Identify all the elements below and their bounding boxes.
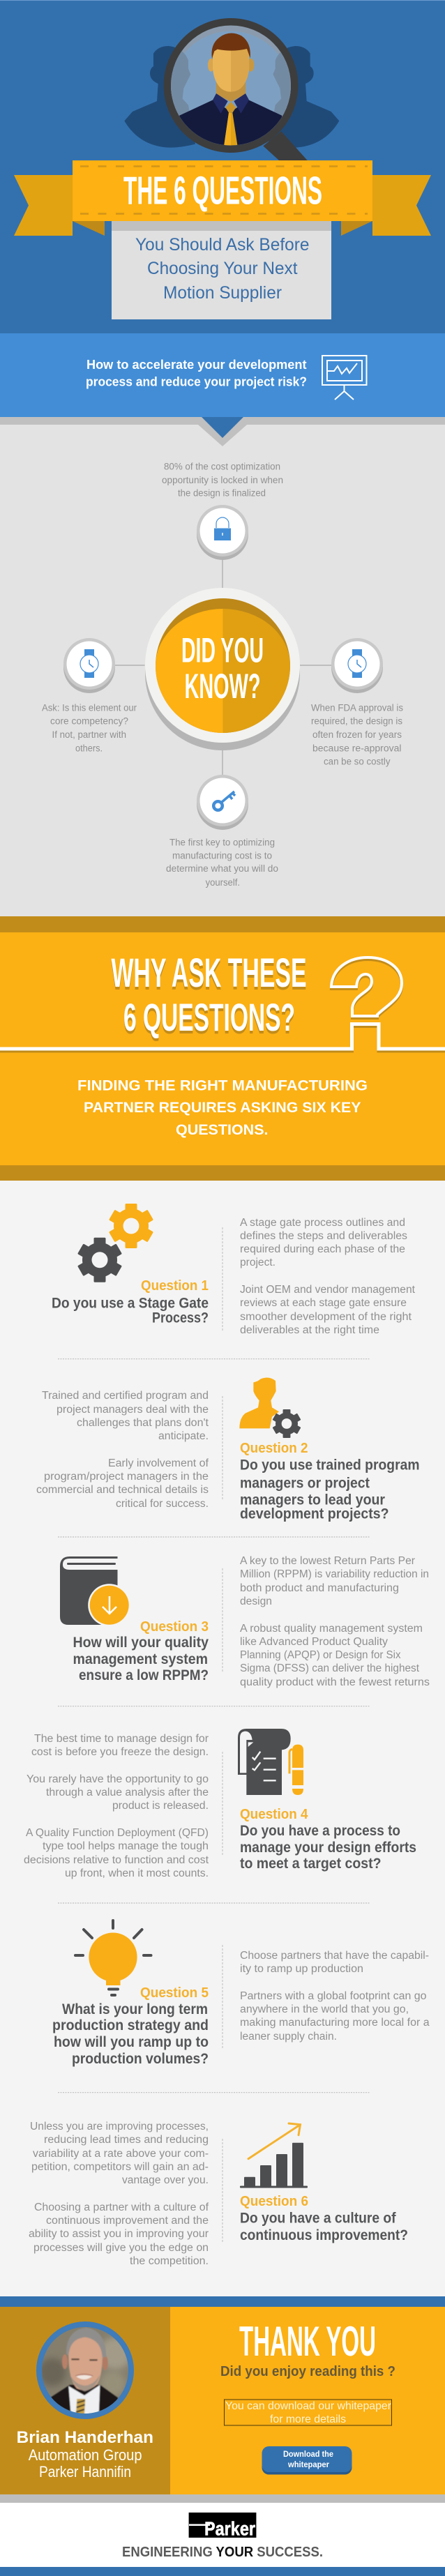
tagline: ENGINEERING YOUR SUCCESS.: [122, 2545, 323, 2560]
fact: cost optimization: [162, 462, 283, 498]
fact: cost optimization: 80% of the cost optimization: [164, 462, 280, 472]
author name: Brian Handerhan: [17, 2428, 153, 2447]
question 5 heading: production strategy and: [52, 2017, 209, 2033]
silhouette: left candidate: [124, 46, 195, 148]
question 2 heading: managers or project: [240, 1476, 370, 1492]
fact: core competency: [42, 703, 137, 754]
question 6 answer: Unless you are improving processes,: [30, 2121, 209, 2132]
question 4 answer: decisions relative to function and cost: [24, 1854, 209, 1866]
question 3 answer: design: [240, 1596, 272, 1607]
fact: first key: yourself.: [206, 877, 240, 888]
fact: FDA approval: can be so costly: [324, 757, 391, 767]
question 1 heading: [52, 1278, 209, 1326]
heading: why ask these: WHY ASK THESE: [112, 950, 307, 996]
connector lines: [115, 555, 331, 775]
question 6 answer: ability to assist you in improving your: [29, 2228, 209, 2240]
question 5 answer: making manufacturing more local for a: [240, 2017, 430, 2029]
question 6 answer: variability at a rate above your com-: [33, 2148, 209, 2160]
question 1 answer: smoother development of the right: [240, 1311, 412, 1323]
question 5 heading: how will you ramp up to: [54, 2034, 209, 2050]
heading: why ask these: [112, 950, 307, 1039]
question 6 answer: continuous improvement and the: [46, 2215, 209, 2227]
subtitle card: You Should Ask Before: [135, 235, 310, 255]
author portrait: [36, 2321, 134, 2419]
fact: core competency: others.: [75, 743, 103, 754]
icon: outlined question mark with line: [0, 957, 445, 1049]
fact: FDA approval: because re-approval: [312, 743, 402, 754]
icon: checklist and pen: [238, 1729, 303, 1795]
question 2 answer: Trained and certified program and: [42, 1390, 209, 1402]
question 5 heading: production volumes?: [72, 2051, 209, 2067]
question 2 answer: project managers deal with the: [56, 1404, 209, 1416]
question 1 answer: defines the steps and deliverables: [240, 1230, 407, 1242]
subtitle card: Motion Supplier: [163, 283, 282, 303]
question 4 heading: Do you have a process to: [240, 1823, 400, 1839]
question 2 heading: managers to lead your: [240, 1492, 385, 1508]
header background: [0, 0, 445, 333]
panel: question 3: [60, 1555, 430, 1688]
question 3 answer: [240, 1555, 430, 1688]
panel: question 1: [52, 1204, 416, 1336]
icon: person with gear: [239, 1377, 301, 1438]
Parker logo: Parker: [204, 2518, 255, 2540]
centre circle: KNOW?: [184, 667, 261, 706]
question 4 answer: up front, when it most counts.: [65, 1867, 209, 1879]
question 3 answer: quality product with the fewest returns: [240, 1676, 430, 1688]
panel: author: [0, 2296, 445, 2494]
icon: magnifying glass over candidate: [124, 18, 339, 160]
panel: acceleration question band: process and reduce your project risk?: [86, 375, 307, 389]
question 3 answer: Planning (APQP) or Design for Six: [240, 1649, 401, 1661]
fact: FDA approval: required, the design is: [311, 716, 402, 727]
subtitle card: [112, 221, 331, 319]
question 1 answer: project.: [240, 1257, 276, 1268]
whitepaper note box: You can download our whitepaper: [225, 2400, 392, 2412]
fact: FDA approval: often frozen for years: [312, 729, 402, 740]
question 3 heading: ensure a low RPPM?: [79, 1667, 209, 1683]
question 5 answer: [240, 1950, 430, 2043]
question 6 answer: reducing lead times and reducing: [44, 2134, 209, 2146]
question 1 heading: Do you use a Stage Gate: [52, 1296, 209, 1312]
question 5 answer: Choose partners that have the capabil-: [240, 1950, 429, 1962]
question 1 answer: required during each phase of the: [240, 1243, 405, 1255]
questions background: [0, 1181, 445, 2296]
icon: rising bar chart: [240, 2123, 308, 2188]
question 5 answer: leaner supply chain.: [240, 2031, 337, 2043]
question 2 answer: anticipate.: [158, 1430, 209, 1442]
panel: acceleration question band: [0, 333, 445, 916]
question 4 answer: cost is before you freeze the design.: [31, 1746, 209, 1758]
question 1 answer: [240, 1217, 416, 1336]
question 2 answer: challenges that plans don't: [77, 1417, 209, 1429]
question 4 heading: Question 4: [240, 1807, 308, 1822]
question 3 answer: like Advanced Product Quality: [240, 1636, 388, 1648]
panel: why ask these 6 questions: [0, 916, 445, 1181]
question 4 answer: [24, 1733, 209, 1879]
Parker logo: [189, 2513, 256, 2540]
question 1 heading: Process?: [152, 1310, 209, 1326]
question 3 heading: management system: [73, 1651, 208, 1667]
icon: presentation board: [322, 356, 367, 400]
lens contents: man in suit: [171, 25, 291, 145]
question 2 answer: critical for success.: [116, 1498, 209, 1510]
question 5 answer: ity to ramp up production: [240, 1963, 363, 1975]
icon: right watch: [331, 638, 383, 693]
fact: cost optimization: opportunity is locked in when: [162, 475, 283, 485]
fact: FDA approval: When FDA approval is: [311, 703, 403, 713]
question 5 answer: Partners with a global footprint can go: [240, 1990, 427, 2002]
icon: light bulb: [75, 1920, 151, 1995]
fact: core competency: If not, partner with: [52, 729, 126, 740]
question 2 heading: development projects?: [240, 1506, 389, 1522]
question 6 answer: Choosing a partner with a culture of: [34, 2202, 209, 2213]
text: finding the right partner: [77, 1078, 368, 1138]
magnifier ring: [163, 18, 298, 153]
fact: first key: The first key to optimizing: [169, 837, 275, 847]
question 6 answer: vantage over you.: [122, 2174, 209, 2186]
magnifier handle: [263, 131, 308, 160]
heading: why ask these: 6 QUESTIONS?: [123, 995, 295, 1039]
panel: question 2: [36, 1377, 420, 1522]
question 6 answer: processes will give you the edge on: [33, 2242, 209, 2254]
question 2 answer: commercial and technical details is: [36, 1484, 209, 1496]
question 6 heading: continuous improvement?: [240, 2227, 408, 2243]
author name: Automation Group: [29, 2446, 142, 2464]
question 4 heading: manage your design efforts: [240, 1840, 416, 1856]
question 3 answer: Sigma (DFSS) can deliver the highest: [240, 1662, 420, 1674]
question 5 heading: [52, 1985, 209, 2067]
text: finding the right partner: QUESTIONS.: [176, 1122, 268, 1138]
ribbon banner: [14, 160, 431, 236]
question 2 answer: [36, 1390, 209, 1510]
panel: question 6: [29, 2121, 408, 2267]
panel: thank you: [170, 2307, 445, 2494]
panel: question 4: [24, 1729, 416, 1879]
question 4 answer: type tool helps manage the tough: [43, 1840, 209, 1852]
question 2 answer: Early involvement of: [108, 1457, 209, 1469]
question 1 answer: Joint OEM and vendor management: [240, 1284, 416, 1296]
subtitle card: Choosing Your Next: [147, 259, 298, 278]
question 3 answer: A key to the lowest Return Parts Per: [240, 1555, 415, 1567]
icon: left watch: [63, 638, 115, 693]
panel: footer: [0, 2494, 445, 2576]
fact: core competency: core competency?: [50, 716, 128, 727]
silhouette: right candidate: [269, 46, 339, 148]
question 5 heading: What is your long term: [62, 2001, 208, 2017]
question 5 heading: Question 5: [140, 1985, 209, 2001]
icon: key: [197, 775, 248, 830]
question 3 answer: Million (RPPM) is variability reduction in: [240, 1568, 429, 1580]
ribbon right tail: [372, 175, 431, 236]
question 6 heading: Question 6: [240, 2194, 308, 2209]
text: finding the right partner: FINDING THE RIGHT MANUFACTURING: [77, 1078, 368, 1093]
ribbon left tail: [14, 175, 73, 236]
question 2 heading: Question 2: [240, 1441, 308, 1456]
question 6 answer: petition, competitors will gain an ad-: [31, 2161, 209, 2173]
centre circle: [145, 588, 300, 750]
panel: question 5: [52, 1920, 430, 2067]
download button: whitepaper: [287, 2460, 329, 2469]
fact: FDA approval: [311, 703, 403, 767]
download button: Download the: [283, 2449, 333, 2459]
author name: [17, 2428, 153, 2480]
question 3 answer: both product and manufacturing: [240, 1582, 399, 1594]
question 1 answer: A stage gate process outlines and: [240, 1217, 405, 1229]
question 4 answer: through a value analysis after the: [46, 1787, 209, 1798]
question 3 heading: Question 3: [140, 1619, 209, 1635]
text: finding the right partner: PARTNER REQUIRES ASKING SIX KEY: [84, 1100, 361, 1116]
question 3 heading: How will your quality: [73, 1635, 209, 1651]
icon: book with download arrow: [60, 1556, 130, 1626]
question 5 answer: anywhere in the world that you go,: [240, 2003, 409, 2015]
download button: [262, 2446, 352, 2474]
question 4 heading: to meet a target cost?: [240, 1856, 381, 1872]
panel: acceleration question band: How to accelerate your development: [86, 358, 307, 372]
question 2 heading: Do you use trained program: [240, 1457, 420, 1473]
whitepaper note box: [225, 2400, 392, 2425]
question 4 answer: product is released.: [112, 1800, 209, 1812]
question 1 heading: Question 1: [141, 1278, 209, 1294]
heading: did you know: DID YOU: [181, 630, 264, 669]
question 6 answer: the competition.: [130, 2255, 209, 2267]
question 6 heading: [240, 2194, 408, 2243]
fact: first key: manufacturing cost is to: [172, 851, 272, 861]
fact: core competency: Ask: Is this element our: [42, 703, 137, 713]
question 4 heading: [240, 1807, 416, 1872]
icon: lock: [197, 505, 248, 560]
whitepaper note box: for more details: [270, 2414, 346, 2425]
question 1 answer: deliverables at the right time: [240, 1324, 379, 1336]
question 4 answer: The best time to manage design for: [34, 1733, 209, 1745]
question 2 heading: [240, 1441, 420, 1522]
question 3 heading: [73, 1619, 209, 1683]
question 6 heading: Do you have a culture of: [240, 2211, 397, 2227]
panel: did you know: [42, 462, 403, 888]
question 3 answer: A robust quality management system: [240, 1623, 423, 1635]
question 2 answer: program/project managers in the: [44, 1471, 209, 1483]
fact: first key: determine what you will do: [166, 863, 278, 874]
author name: Parker Hannifin: [39, 2463, 131, 2480]
fact: first key: [166, 837, 278, 888]
fact: cost optimization: the design is finalized: [178, 488, 266, 498]
icon: gears: [77, 1204, 153, 1282]
question 6 answer: [29, 2121, 209, 2267]
question 4 answer: You rarely have the opportunity to go: [27, 1773, 209, 1785]
thank you question: Did you enjoy reading this ?: [220, 2364, 395, 2379]
question 4 answer: A Quality Function Deployment (QFD): [26, 1827, 209, 1839]
question 1 answer: reviews at each stage gate ensure: [240, 1297, 407, 1309]
